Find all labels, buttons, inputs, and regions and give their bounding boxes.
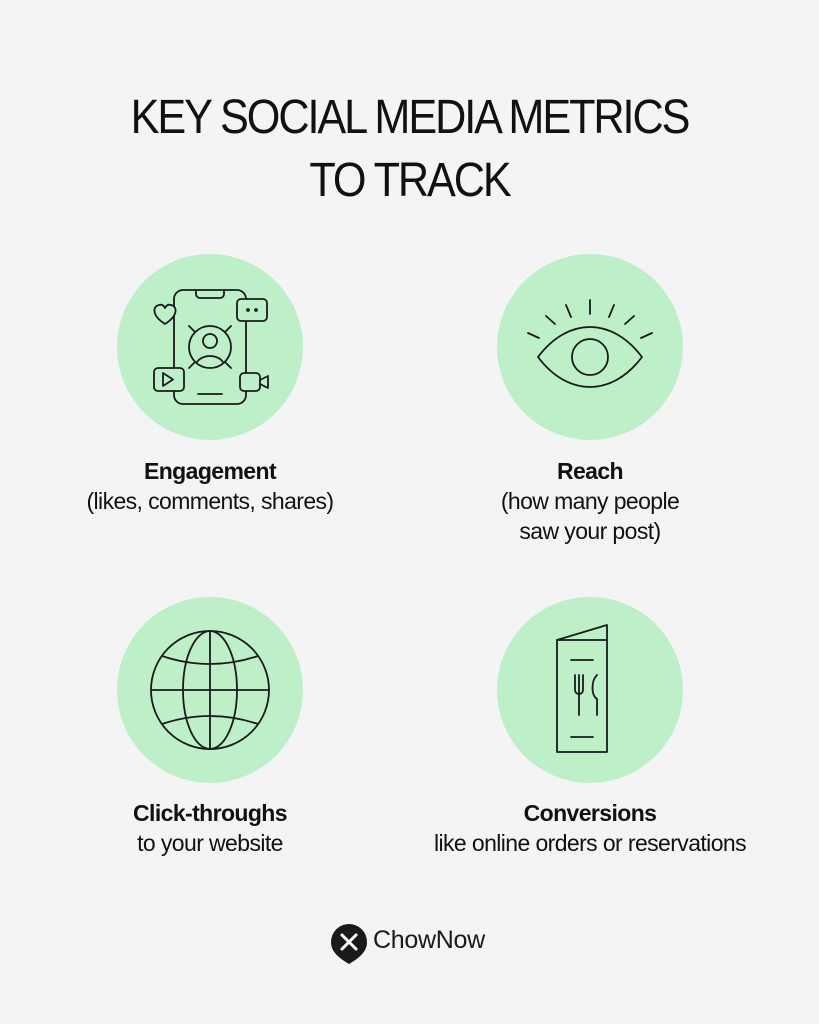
label: reach: (how many people [501, 488, 679, 514]
label: engagement: Engagement [144, 458, 276, 484]
label: reach [501, 458, 679, 544]
title: KEY SOCIAL MEDIA METRICS [131, 91, 688, 144]
title: TO TRACK [309, 154, 510, 207]
label: conversions [434, 800, 746, 856]
logo icon [331, 924, 367, 964]
label: click-throughs: to your website [137, 830, 283, 856]
label: click-throughs: Click-throughs [133, 800, 287, 826]
logo text: ChowNow [373, 926, 485, 954]
label: reach: saw your post) [519, 518, 661, 544]
icon: eye [497, 254, 683, 440]
label: engagement [86, 458, 334, 514]
label: engagement: (likes, comments, shares) [86, 488, 334, 514]
label: reach: Reach [557, 458, 623, 484]
label: click-throughs [133, 800, 287, 856]
icon: menu [497, 597, 683, 783]
icon: engagement phone [117, 254, 303, 440]
icon: globe [117, 597, 303, 783]
label: conversions: like online orders or reservations [434, 830, 746, 856]
title [131, 91, 688, 207]
label: conversions: Conversions [524, 800, 656, 826]
